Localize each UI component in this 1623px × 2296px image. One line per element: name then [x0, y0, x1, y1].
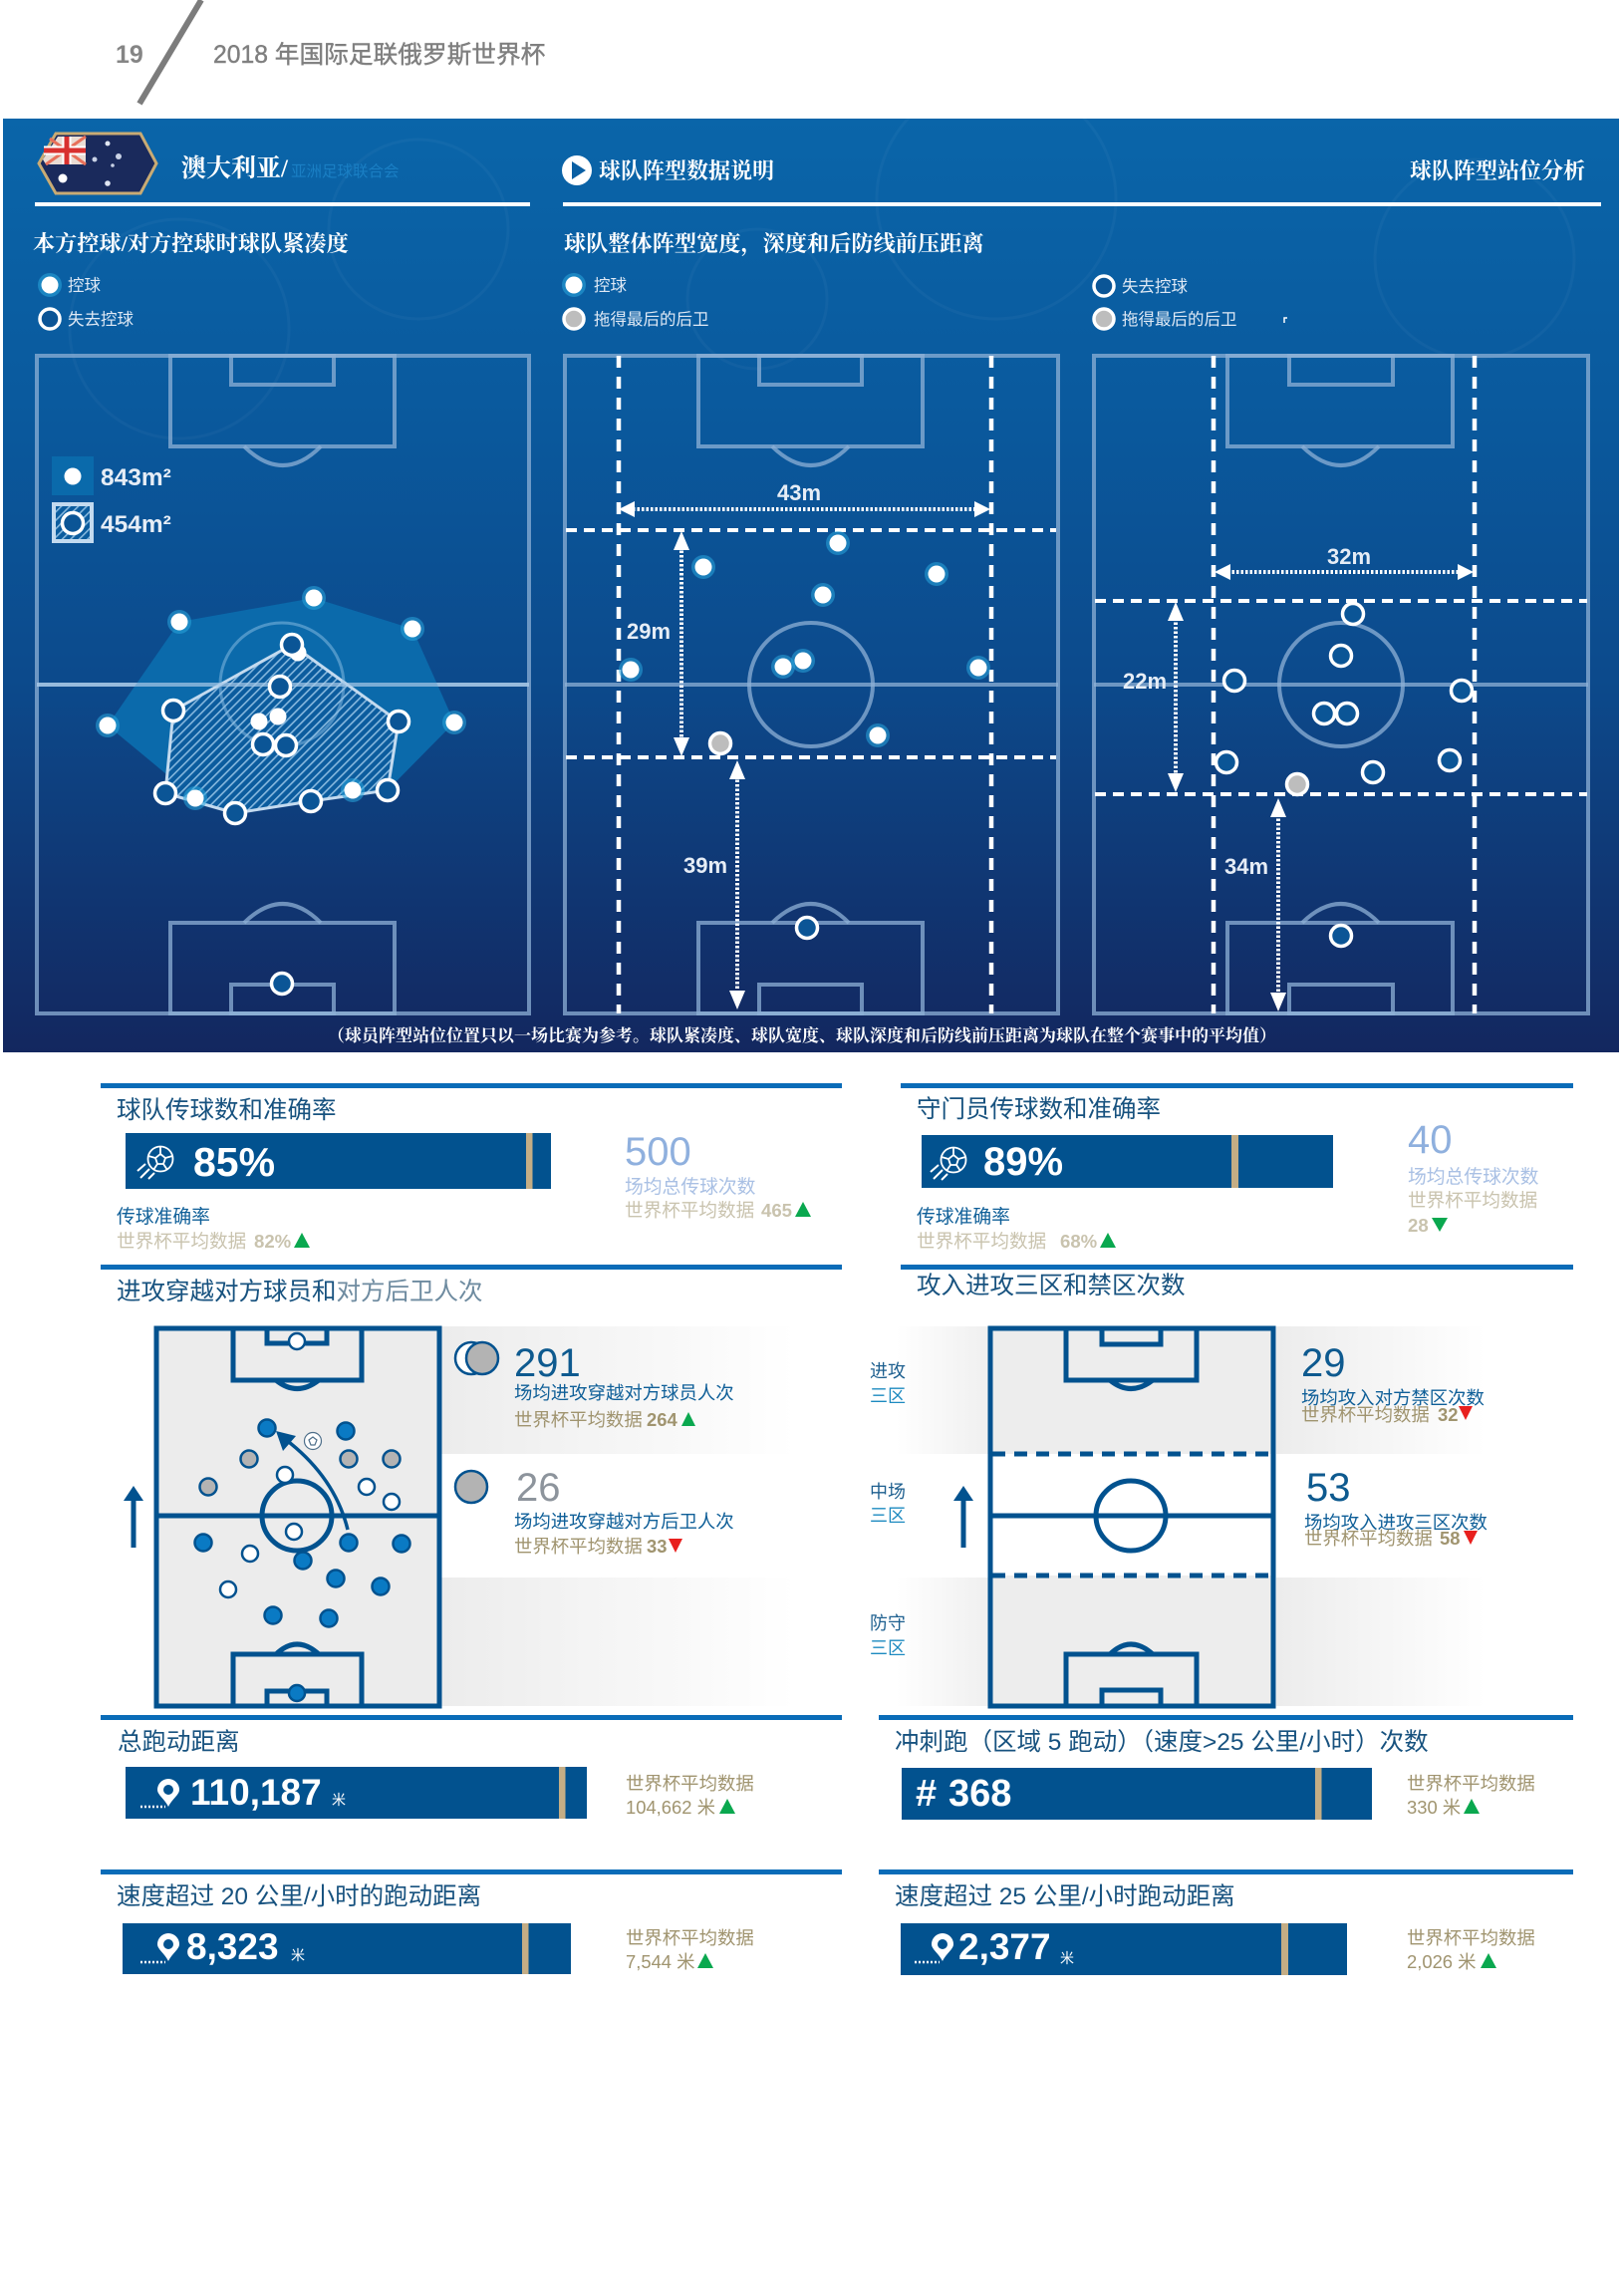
world cup average: 世界杯平均数据	[917, 1231, 1046, 1252]
stat: penalty area entries: 世界杯平均数据	[1301, 1404, 1430, 1425]
world cup average: 世界杯平均数据	[1407, 1927, 1535, 1948]
legend: out of possession: 失去控球	[1122, 277, 1188, 296]
bar: 2,377	[958, 1926, 1051, 1967]
world cup average	[626, 1927, 754, 1972]
pitch: compactness	[37, 356, 529, 1013]
legend: compactness	[38, 273, 134, 329]
bar: 368	[948, 1773, 1011, 1815]
stat: final third entries: 世界杯平均数据	[1304, 1528, 1433, 1549]
world cup average: 世界杯平均数据	[1407, 1773, 1535, 1794]
heading: width depth: 球队整体阵型宽度，深度和后防线前压距离	[564, 230, 984, 257]
panel: goalkeeper passing	[901, 1083, 1573, 1252]
panel: team passing	[101, 1083, 842, 1252]
stat: final third entries: 53	[1306, 1466, 1351, 1510]
stat: defenders bypassed: 场均进攻穿越对方后卫人次	[514, 1511, 734, 1532]
stat: goalkeeper passes	[1408, 1118, 1539, 1236]
icon: play button	[562, 155, 592, 185]
area: out of possession hatch	[165, 645, 399, 813]
panel: team formation analysis	[3, 80, 1619, 1052]
zone labels: 进攻	[870, 1361, 906, 1381]
panel: total distance	[101, 1715, 842, 1819]
area legend possession: 843m²	[101, 464, 171, 491]
bar: 110,187	[190, 1772, 322, 1813]
bar: 米	[332, 1792, 346, 1808]
other opponents	[220, 1467, 400, 1597]
panel: distance above 25 km/h	[879, 1869, 1573, 1975]
zone labels: 防守	[870, 1613, 906, 1633]
stat: players bypassed: 世界杯平均数据	[514, 1409, 643, 1430]
confederation: 亚洲足球联合会	[291, 162, 400, 180]
world cup average: 7,544 米	[626, 1951, 695, 1972]
world cup average: 2,026 米	[1407, 1951, 1477, 1972]
bar	[126, 1767, 587, 1819]
arrow: line height 34m	[1224, 798, 1286, 1011]
legend: out of possession	[1094, 276, 1287, 329]
arrow: width 43m	[619, 480, 990, 517]
icon: location pin	[915, 1933, 953, 1962]
stat: defenders bypassed: 26	[516, 1466, 560, 1510]
world cup average	[117, 1231, 310, 1252]
page number: 19	[116, 41, 143, 69]
legend: in possession: 拖得最后的后卫	[594, 310, 709, 329]
world cup average	[626, 1773, 754, 1818]
stat: penalty area entries: 29	[1301, 1341, 1345, 1385]
world cup average: 330 米	[1407, 1797, 1461, 1818]
players: in possession	[96, 586, 466, 810]
bar: pass accuracy	[126, 1133, 551, 1189]
stat: players bypassed: 场均进攻穿越对方球员人次	[514, 1382, 734, 1403]
stat: players bypassed	[455, 1341, 734, 1430]
arrow: depth 22m	[1123, 602, 1184, 792]
area: possession polygon	[108, 598, 454, 813]
icon: location pin	[140, 1779, 179, 1807]
world cup average	[1407, 1927, 1535, 1972]
arrow: pass	[276, 1431, 348, 1530]
bypassed opponents	[199, 1451, 401, 1495]
stat: goalkeeper passes: 场均总传球次数	[1408, 1166, 1539, 1187]
legend: compactness: 失去控球	[68, 310, 134, 329]
area legend out of possession	[54, 504, 171, 541]
stat bands	[439, 1326, 795, 1706]
header rule left	[35, 202, 530, 206]
heading: 攻入进攻三区和禁区次数	[917, 1272, 1186, 1299]
stat: total passes	[625, 1130, 811, 1221]
legend: in possession	[562, 273, 709, 329]
zone labels	[870, 1361, 906, 1658]
zone bands	[897, 1326, 1486, 1706]
stat: penalty area entries: 32	[1438, 1404, 1458, 1425]
panel: final third entries	[870, 1265, 1573, 1706]
stat: final third entries: 58	[1440, 1528, 1460, 1549]
stat: players bypassed: 264	[647, 1409, 677, 1430]
label: pass accuracy: 传球准确率	[117, 1206, 210, 1227]
arrow: depth 29m	[627, 531, 689, 756]
bar	[901, 1923, 1347, 1975]
pitch: out of possession width and depth	[1094, 356, 1588, 1013]
heading: 守门员传球数和准确率	[917, 1095, 1161, 1123]
players	[619, 531, 990, 939]
legend: compactness: 控球	[68, 276, 102, 295]
pitch diagram	[990, 1328, 1273, 1706]
diagonal slash	[139, 0, 201, 104]
bar: 米	[1060, 1950, 1074, 1966]
stat: goalkeeper passes: 40	[1408, 1118, 1453, 1162]
world cup average: 世界杯平均数据	[626, 1773, 754, 1794]
heading: formation analysis: 球队阵型站位分析	[1410, 158, 1585, 183]
players: out of possession	[155, 634, 408, 995]
heading: 速度超过 20 公里/小时的跑动距离	[117, 1882, 481, 1910]
stat: penalty area entries: 场均攻入对方禁区次数	[1301, 1387, 1485, 1408]
heading: compactness: 本方控球/对方控球时球队紧凑度	[33, 231, 349, 256]
bar: goalkeeper accuracy	[922, 1135, 1333, 1188]
stat: players bypassed: 291	[514, 1341, 581, 1385]
document title: 2018 年国际足联俄罗斯世界杯	[213, 41, 546, 69]
zone labels: 三区	[870, 1638, 906, 1658]
stat: final third entries: 场均攻入进攻三区次数	[1304, 1512, 1488, 1533]
bar: 8,323	[186, 1926, 279, 1967]
panel: line breaks	[101, 1265, 842, 1706]
world cup average: 68%	[1060, 1231, 1098, 1252]
heading: 总跑动距离	[118, 1728, 239, 1756]
world cup average: 世界杯平均数据	[626, 1927, 754, 1948]
arrow: attacking direction	[124, 1486, 143, 1548]
arrow: depth 29m: 29m	[627, 619, 671, 644]
heading: 进攻穿越对方球员和对方后卫人次	[117, 1278, 482, 1305]
arrow: depth 22m: 22m	[1123, 669, 1167, 694]
arrow: line height 39m	[683, 760, 745, 1009]
icon: ball	[137, 1146, 173, 1179]
icon: ball	[931, 1148, 966, 1180]
attacking players	[195, 1419, 410, 1626]
stat: total passes: 500	[625, 1130, 691, 1174]
stat: total passes: 世界杯平均数据	[625, 1200, 754, 1221]
bar: goalkeeper accuracy: 89%	[983, 1140, 1063, 1184]
zone labels: 三区	[870, 1506, 906, 1526]
heading: 冲刺跑（区域 5 跑动）（速度>25 公里/小时）次数	[895, 1728, 1429, 1756]
icon: location pin	[140, 1933, 179, 1962]
zone labels: 三区	[870, 1386, 906, 1406]
area legend possession	[52, 456, 171, 495]
heading: formation data notes: 球队阵型数据说明	[599, 158, 774, 183]
icon: ball	[305, 1433, 321, 1449]
stat: defenders bypassed	[455, 1466, 734, 1557]
stat: goalkeeper passes: 28	[1408, 1215, 1429, 1236]
icon: Australia flag badge	[39, 134, 156, 193]
arrow: width 32m: 32m	[1327, 544, 1371, 569]
world cup average: 82%	[254, 1231, 292, 1252]
bar: #	[916, 1773, 937, 1815]
bar: pass accuracy: 85%	[193, 1139, 275, 1185]
caption: （球员阵型站位位置只以一场比赛为参考。球队紧凑度、球队宽度、球队深度和后防线前压距离为球队在整个赛事中的平均值）	[328, 1025, 1276, 1045]
pitch diagram	[156, 1328, 439, 1706]
area legend out of possession: 454m²	[101, 511, 171, 538]
world cup average: 世界杯平均数据	[117, 1231, 246, 1252]
pitch: in possession width and depth	[565, 356, 1058, 1013]
stat: final third entries	[1304, 1466, 1488, 1549]
players	[1216, 604, 1473, 947]
world cup average: 104,662 米	[626, 1797, 715, 1818]
label: pass accuracy: 传球准确率	[917, 1206, 1010, 1227]
heading: 速度超过 25 公里/小时跑动距离	[895, 1882, 1235, 1910]
bar	[123, 1923, 571, 1974]
arrow: line height 34m: 34m	[1224, 854, 1268, 879]
stat: goalkeeper passes: 世界杯平均数据	[1408, 1190, 1537, 1211]
stat: penalty area entries	[1301, 1341, 1485, 1425]
stat: defenders bypassed: 33	[647, 1536, 667, 1557]
arrow: width 32m	[1215, 544, 1474, 580]
panel: sprints	[879, 1715, 1573, 1820]
stat: defenders bypassed: 世界杯平均数据	[514, 1536, 643, 1557]
bar: 米	[291, 1947, 305, 1963]
team name: 澳大利亚/	[181, 154, 289, 182]
stat: total passes: 465	[761, 1200, 792, 1221]
panel: distance above 20 km/h	[101, 1869, 842, 1974]
heading: 球队传球数和准确率	[117, 1096, 337, 1124]
arrow: line height 39m: 39m	[683, 853, 727, 878]
page header	[116, 0, 546, 104]
world cup average	[917, 1231, 1116, 1252]
stat: total passes: 场均总传球次数	[625, 1176, 756, 1197]
zone labels: 中场	[870, 1482, 906, 1502]
legend: out of possession: 拖得最后的后卫	[1122, 310, 1237, 329]
arrow: attacking direction	[953, 1486, 973, 1548]
header rule right	[563, 202, 1601, 206]
arrow: width 43m: 43m	[777, 480, 821, 505]
world cup average	[1407, 1773, 1535, 1818]
bar	[902, 1768, 1372, 1820]
legend: in possession: 控球	[594, 276, 628, 295]
